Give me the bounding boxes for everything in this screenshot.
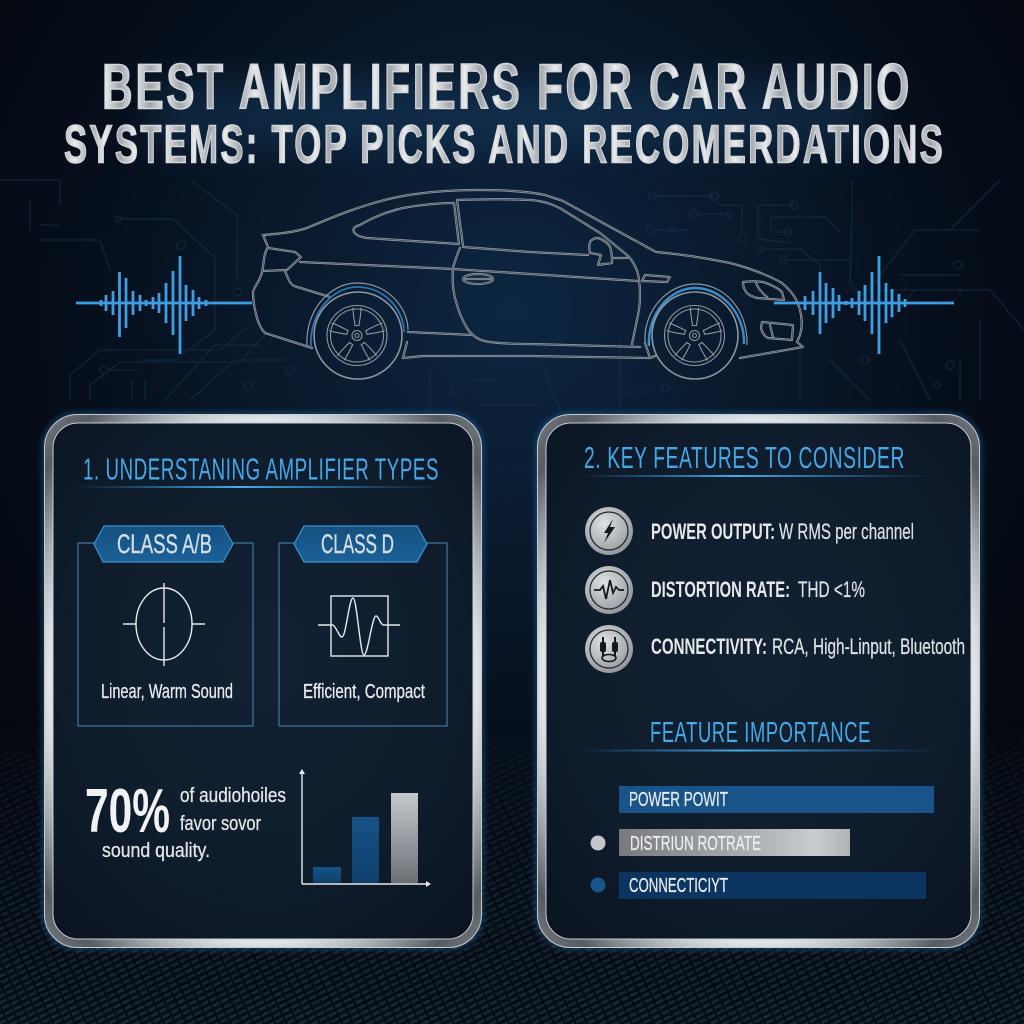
icon: class A/B circuit symbol — [123, 583, 205, 666]
card: class D — [279, 526, 447, 726]
feature: distortion rate: DISTORTION RATE: — [651, 577, 790, 602]
feature: power output: POWER OUTPUT: — [651, 519, 775, 544]
feature: distortion rate — [585, 566, 865, 614]
bar chart — [299, 769, 431, 887]
icon: pulse waveform — [585, 566, 633, 614]
feature: power output: W RMS per channel — [779, 519, 914, 544]
circuit board traces — [0, 180, 1024, 430]
horizontal bar: connectivity — [590, 872, 926, 899]
panel: key features to consider — [535, 412, 982, 950]
feature: connectivity: CONNECTIVITY: — [651, 634, 767, 659]
card: class A/B — [78, 526, 253, 726]
panel interior — [546, 423, 971, 939]
heading: feature importance: FEATURE IMPORTANCE — [650, 717, 871, 749]
feature: power output — [585, 507, 914, 555]
sound wave right — [774, 256, 954, 354]
stat: 70 percent: sound quality. — [102, 840, 210, 862]
feature: distortion rate: THD <1% — [798, 577, 865, 602]
sound wave left — [76, 256, 252, 354]
stat: 70 percent: favor sovor — [180, 813, 261, 835]
horizontal bar: distortion — [590, 829, 850, 856]
horizontal bar: power: POWER POWIT — [629, 789, 728, 811]
car outline illustration — [253, 190, 803, 379]
horizontal bar: power — [619, 786, 934, 813]
panel frame — [538, 414, 980, 948]
car body lines — [253, 190, 803, 358]
label: class A/B: Linear, Warm Sound — [101, 681, 233, 703]
badge: class A/B — [94, 526, 233, 562]
label: class D: Efficient, Compact — [303, 681, 425, 703]
horizontal bar: distortion: DISTRIUN ROTRATE — [630, 833, 761, 855]
stat: 70 percent — [85, 777, 286, 862]
panel interior — [53, 423, 473, 939]
rear wheel — [307, 283, 408, 379]
carbon fibre floor — [0, 722, 1024, 1024]
badge: class A/B: CLASS A/B — [117, 529, 212, 559]
badge: class D: CLASS D — [321, 529, 394, 559]
panel frame — [44, 414, 482, 948]
stat: 70 percent: 70% — [85, 777, 170, 846]
heading: section 1: 1. UNDERSTANING AMPLIFIER TYPES — [83, 452, 439, 486]
feature: connectivity — [585, 625, 965, 673]
front wheel — [645, 284, 747, 379]
stat: 70 percent: of audiohoiles — [180, 785, 286, 807]
horizontal bar: connectivity: CONNECTICIYT — [629, 875, 728, 897]
panel: understanding amplifier types — [42, 412, 484, 950]
title — [64, 50, 945, 174]
icon: lightning bolt — [585, 507, 633, 555]
icon: connector plugs — [585, 625, 633, 673]
badge: class D — [294, 526, 427, 562]
icon: class D waveform — [318, 596, 400, 656]
